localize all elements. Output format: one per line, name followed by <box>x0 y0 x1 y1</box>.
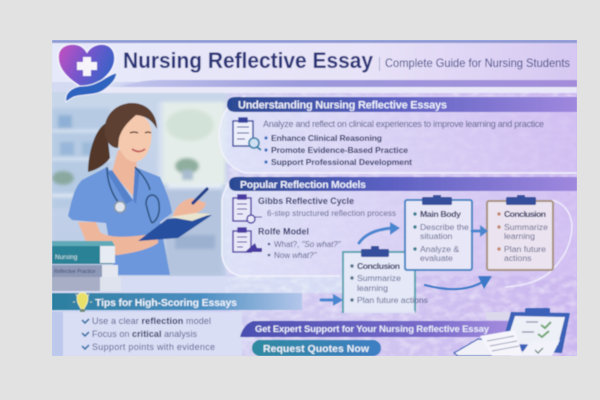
card: conclusion right: learning <box>504 231 535 241</box>
floor band <box>52 276 342 293</box>
panel: tips list: Support points with evidence <box>92 342 215 352</box>
card: conclusion left: Plan future actions <box>357 295 429 305</box>
illustration: nurse <box>68 103 212 275</box>
benefits list: Support Professional Development <box>271 157 412 167</box>
tips heading bar <box>52 292 302 312</box>
button: request quotes now <box>252 340 381 356</box>
clinic background scene <box>52 88 227 288</box>
books stack: Reflective Practice <box>54 269 96 275</box>
icon: light bulb <box>73 292 92 312</box>
open book <box>138 215 212 241</box>
section heading bar <box>227 97 577 112</box>
neck <box>112 150 137 196</box>
hair ponytail <box>88 123 110 172</box>
card: main body: Analyze & <box>420 244 459 254</box>
benefits list: Enhance Clinical Reasoning <box>271 133 382 143</box>
call to action banner <box>240 321 515 337</box>
card: conclusion left <box>343 246 429 312</box>
forearm <box>78 222 158 255</box>
card: conclusion right: Conclusion <box>504 209 546 219</box>
card: conclusion left: learning <box>357 283 388 293</box>
card: main body: Main Body <box>420 209 461 219</box>
panel: tips list: Focus on critical analysis <box>92 329 198 339</box>
panel: understanding nursing reflective essays: Understanding Nursing Reflective Essays <box>238 100 447 112</box>
intro text: Analyze and reflect on clinical experiences to improve learning and practice <box>263 119 544 129</box>
tips heading bar: Tips for High-Scoring Essays <box>95 297 237 309</box>
panel: popular reflection models: Popular Reflection Models <box>240 179 366 191</box>
books stack <box>52 241 121 291</box>
arrow: models to main body <box>359 222 400 243</box>
title: Nursing Reflective Essay <box>123 48 373 73</box>
mottled texture <box>225 92 577 356</box>
panel: popular reflection models <box>222 177 577 276</box>
raised hand and pen <box>173 198 206 220</box>
card: conclusion right: Summarize <box>504 222 548 232</box>
card: conclusion right: Plan future <box>504 244 546 254</box>
card: conclusion left: Conclusion <box>357 261 400 271</box>
card: main body: Describe the <box>420 222 469 232</box>
card: main body: situation <box>420 231 453 241</box>
card: main body: evaluate <box>420 253 453 263</box>
call to action banner: Get Expert Support for Your Nursing Reflective Essay <box>255 324 490 335</box>
arrow: conclusion sweep <box>425 276 492 289</box>
header band <box>52 40 577 93</box>
panel: tips list <box>52 312 242 356</box>
icon: heart with cross and caring hand <box>58 44 117 102</box>
icon: rolfe clipboard <box>233 228 262 252</box>
icon: clipboard with magnifier <box>233 118 261 150</box>
panel: popular reflection models: 6-step structured reflection process <box>267 209 396 218</box>
arrow: main body to conclusion <box>472 225 488 237</box>
scrubs <box>68 167 172 275</box>
face <box>115 115 152 162</box>
background panel <box>52 40 577 356</box>
panel: popular reflection models: Now what?" <box>274 251 318 260</box>
section heading bar <box>229 177 577 191</box>
rolfe model: Rolfe Model <box>258 226 309 236</box>
subtitle: Complete Guide for Nursing Students <box>385 56 570 70</box>
icon: documents and checklist clipboard <box>454 308 570 356</box>
panel: popular reflection models: What?, "So what?" <box>274 240 342 249</box>
flow arrows <box>321 222 492 306</box>
button: request quotes now: Request Quotes Now <box>263 343 370 355</box>
hair <box>105 103 157 148</box>
card: conclusion right: actions <box>504 253 532 263</box>
card: conclusion right <box>487 195 572 287</box>
benefits list <box>264 133 412 167</box>
eyes and mouth <box>130 132 151 133</box>
gibbs reflective cycle: Gibbs Reflective Cycle <box>258 196 354 206</box>
infographic canvas <box>52 40 577 356</box>
card: conclusion left: Summarize <box>357 273 401 283</box>
panel: tips list: Use a clear reflection model <box>92 316 211 326</box>
arrow: tips to conclusion <box>321 294 343 306</box>
books stack: Nursing <box>55 254 78 261</box>
benefits list: Promote Evidence-Based Practice <box>271 145 408 155</box>
panel: understanding nursing reflective essays <box>219 96 577 173</box>
stethoscope <box>107 167 159 223</box>
icon: gibbs clipboard <box>233 195 262 223</box>
card: main body <box>405 195 472 270</box>
